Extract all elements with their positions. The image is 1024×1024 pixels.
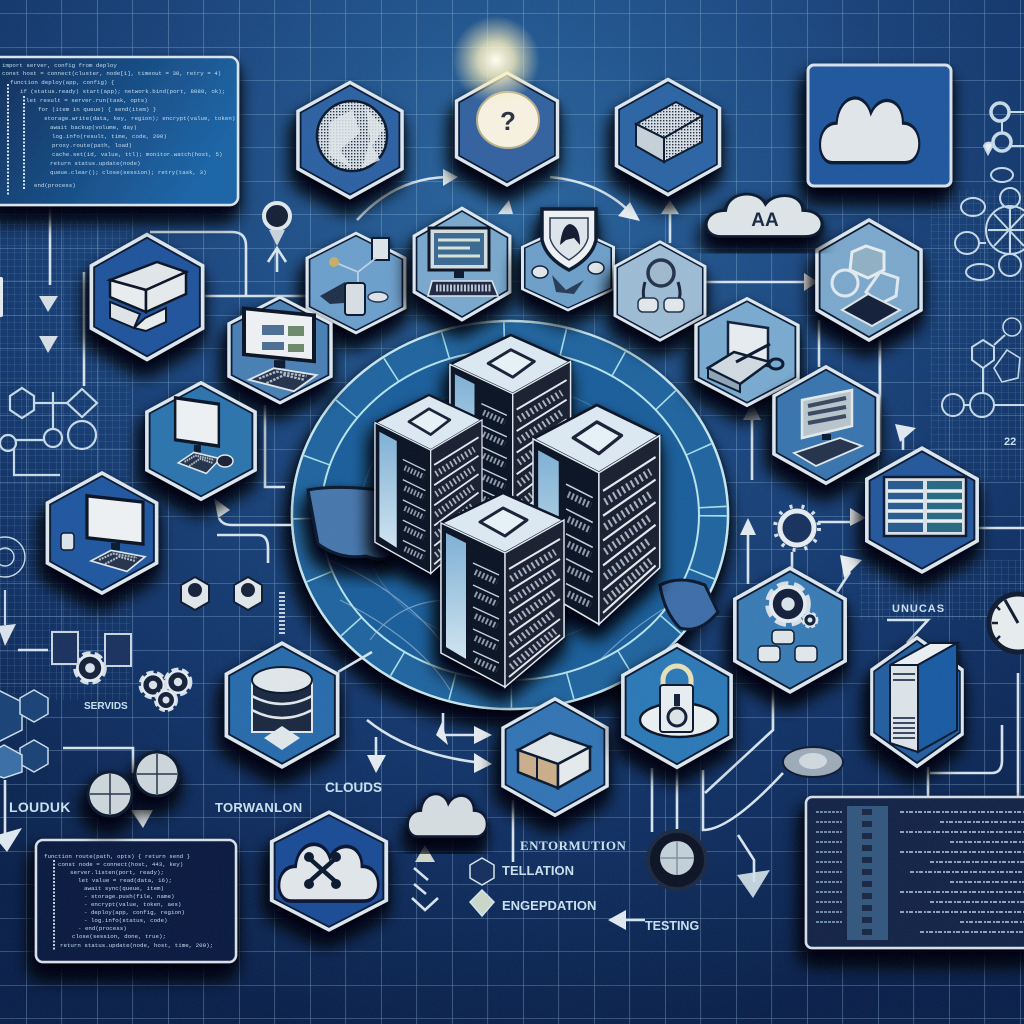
code panel: bottom left: const node = connect(host, 443, key) [58,861,183,868]
code panel: bottom left: - encrypt(value, token, aes) [84,901,181,908]
badge icons beside labels [470,858,494,916]
hexagon: monitor 1 [229,297,331,403]
code panel: bottom left: await sync(queue, item) [84,885,164,892]
hexagon: data racks [867,448,977,572]
code panel: top left: if (status.ready) start(app); network.bind(port, 8080, ok); [20,88,225,95]
gear ring [775,506,819,550]
cloud with people: AA [751,210,779,231]
hexagon: equipment [617,79,719,195]
hexagon: headset [615,242,705,340]
code panel: top left: function deploy(app, config) { [10,79,114,86]
hexagon: printer [696,299,798,405]
code panel: top left: log.info(result, time, code, 200) [52,133,167,140]
code panel: top left: const host = connect(cluster, node[1], timeout = 30, retry = 4) [2,70,221,77]
gear cluster lower right [783,747,843,777]
floating data tag left of servers [308,487,394,559]
code panel: bottom left: - log.info(status, code) [84,917,168,924]
hexagon: network nodes [307,233,405,333]
clock [989,594,1024,652]
down arrow left edge [0,624,16,646]
molecule diagrams right [942,103,1024,417]
hexagon: question mark [457,73,557,185]
hexagon: box [91,235,203,359]
code panel: top left: let result = server.run(task, opts) [26,97,148,104]
nuts, documents and gears left [52,577,282,709]
code panel: bottom left: function route(path, opts) { return send } [44,853,190,860]
compass dials [88,752,179,816]
code panel: top left: import server, config from deploy [2,62,117,69]
hexagon: shield [522,209,614,310]
pin icon [264,203,290,272]
label clouds: CLOUDS [325,780,382,795]
central circular platform [292,321,728,709]
code panel: top left: for (item in queue) { send(item) } [38,106,156,113]
hexagon: gear team [735,568,845,692]
code panel: bottom left: close(session, done, true); [72,933,166,940]
code panel: bottom left: - deploy(app, config, region) [84,909,185,916]
label encryption: ENGEPDATION [502,898,596,913]
code panel: bottom left: return status.update(node, host, time, 200); [60,942,213,949]
label unucas: UNUCAS [892,603,945,615]
label entormution: ENTORMUTION [520,838,626,853]
hexagon: gears and chip [817,220,921,340]
label tellation: TELLATION [502,863,574,878]
globe node bottom [648,831,706,889]
small hex cluster bottom left [0,690,48,778]
glow above question hexagon [452,16,540,104]
code panel: bottom right [806,797,1024,948]
label testing: TESTING [645,919,699,933]
molecule diagrams left [0,388,97,625]
label services: SERVIDS [84,701,128,712]
hexagon: monitor 3 [147,383,255,499]
label right edge: 22 [1004,436,1016,448]
hexagon: cubes [503,699,607,815]
cloud icon bottom [408,794,487,837]
code panel: bottom left [36,840,236,962]
white tab on left edge [0,277,3,317]
code panel: top left: storage.write(data, key, region); encrypt(value, token) [44,115,235,122]
code panel: bottom left: let value = read(data, 16); [78,877,172,884]
hexagon: desktop terminal [414,208,510,320]
hexagon: monitor 2 [774,367,878,483]
hexagon: monitor 4 [47,473,157,593]
connector arrows [0,169,1024,930]
floating data tag right of servers [660,580,718,629]
code panel: top left: queue.clear(); close(session); retry(task, 3) [50,169,207,176]
code panel: top left: cache.set(id, value, ttl); monitor.watch(host, 5) [52,151,222,158]
code panel: top left: end(process) [34,182,76,189]
hexagon: tower server [872,638,962,766]
hexagon: question mark: ? [500,106,516,136]
cloud panel: top right [808,65,951,186]
blueprint labels: LOUDUK [9,799,71,815]
code panel: top left: await backup(volume, day) [50,124,137,131]
code panel: top left: proxy.route(path, load) [52,142,132,149]
code panel: bottom left: - storage.push(file, name) [84,893,174,900]
hexagon: padlock cloud [623,645,731,767]
hexagon: globe [298,82,402,198]
label forwarding: TORWANLON [215,800,302,815]
hexagon: database [226,643,338,767]
code panel: bottom left: server.listen(port, ready); [70,869,164,876]
code panel: bottom left: - end(process) [78,925,127,932]
hexagon: cloud network [272,812,386,930]
code panel: top left: return status.update(node) [50,160,140,167]
cloud with people [706,194,822,236]
code panel: top left [0,57,238,205]
server cluster [375,335,660,687]
